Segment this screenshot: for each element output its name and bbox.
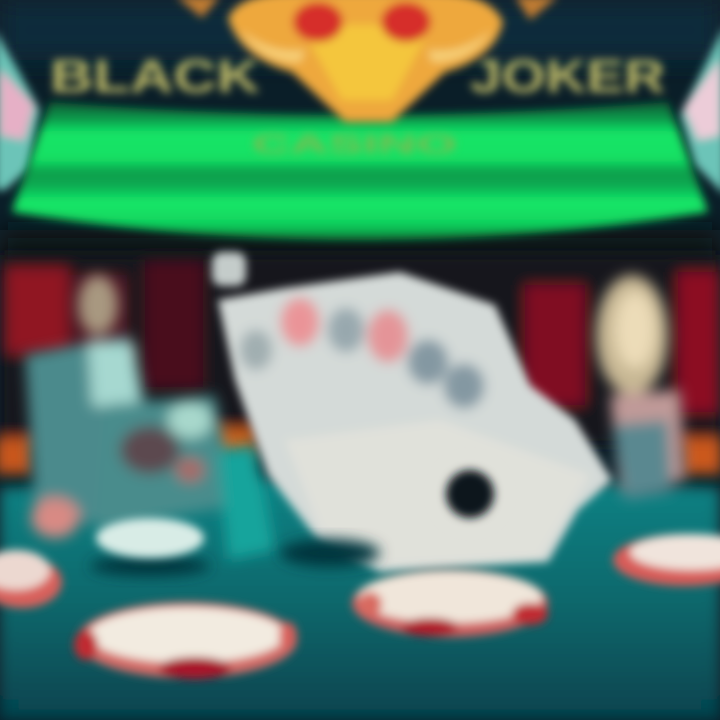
- chip bottom left: [74, 602, 297, 679]
- side lights: [0, 25, 720, 195]
- fan of cards: [212, 252, 612, 572]
- figure left: [25, 275, 275, 560]
- chip center: [352, 569, 548, 637]
- small top card: [212, 252, 246, 286]
- upper glow: [0, 0, 720, 270]
- banner subtitle: CASINO: [252, 129, 457, 159]
- chip middle left: [96, 518, 204, 558]
- curtains: [0, 255, 720, 474]
- title right word: JOKER: [470, 50, 665, 102]
- title text: [50, 50, 665, 159]
- table surface: [0, 479, 720, 720]
- figure right: [596, 275, 685, 500]
- chip shadows: [90, 539, 380, 576]
- title left word: BLACK: [50, 50, 260, 102]
- black spot: [434, 458, 506, 530]
- green banner: [12, 102, 708, 240]
- chip right: [613, 534, 720, 586]
- card pips: [240, 298, 484, 408]
- chip far left: [0, 550, 62, 608]
- gold emblem: [176, 0, 558, 122]
